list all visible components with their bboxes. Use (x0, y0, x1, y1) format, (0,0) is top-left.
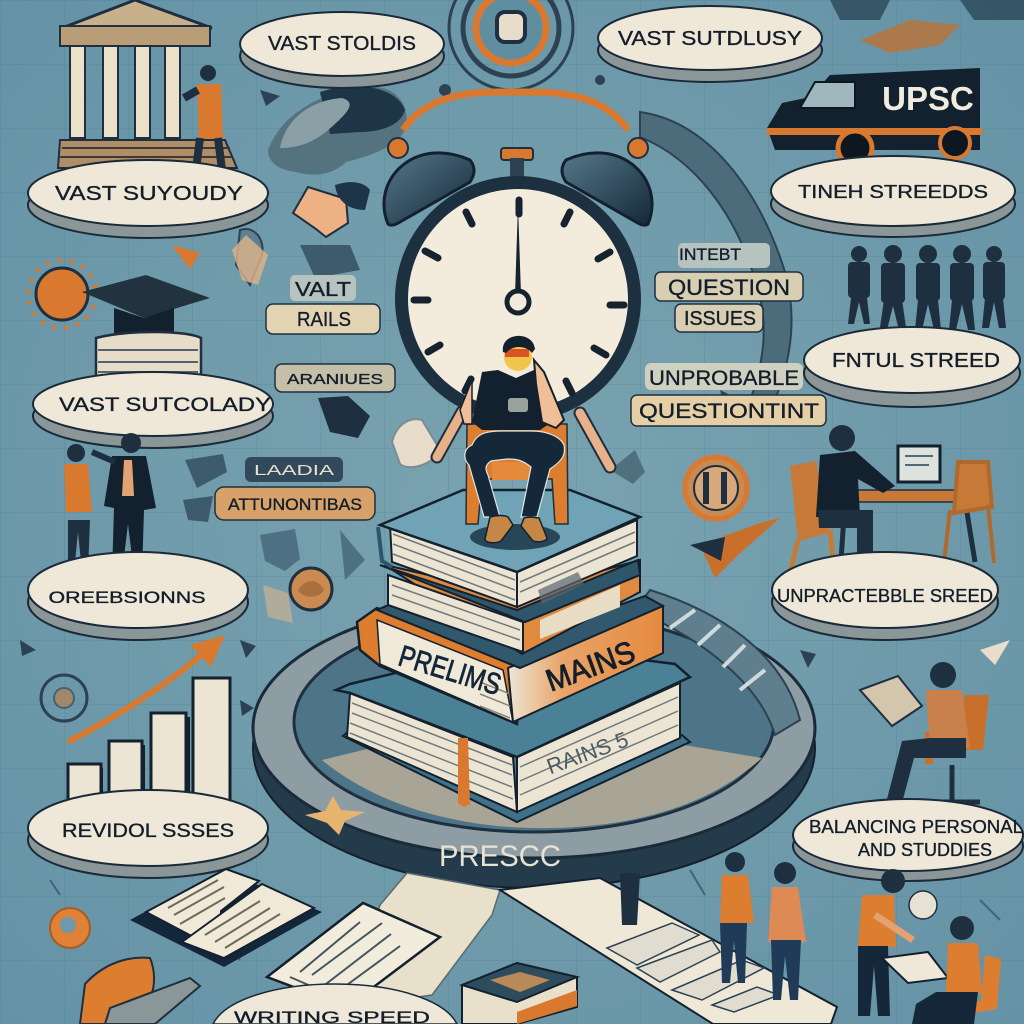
tag: VALT RAILS: RAILS (297, 309, 351, 331)
circular platform ring: PRESCC (439, 840, 561, 873)
icon: classical building with person (58, 0, 237, 170)
label: left disc 4 (28, 790, 268, 878)
label: left disc 2 (33, 372, 273, 448)
second book (380, 560, 640, 654)
orange ring doodle and bag (50, 908, 200, 1024)
group: two people talking (64, 433, 156, 574)
label: right disc 3 (772, 552, 998, 640)
label: right disc 4 (793, 799, 1023, 881)
figures: two standing students (720, 852, 806, 1000)
label: left disc 4: REVIDOL SSSES (62, 821, 234, 842)
label: right disc 1: TINEH STREEDDS (798, 182, 988, 202)
tag: INTEBT QUESTION ISSUES (655, 243, 803, 332)
tag: VALT RAILS (266, 275, 380, 334)
label: top-left disc (28, 160, 268, 238)
tag: ARANIUES: ARANIUES (287, 371, 383, 388)
tag: UNPROBABLE QUESTIONTINT: UNPROBABLE (649, 367, 799, 390)
tag: ATTUNONTIBAS: ATTUNONTIBAS (228, 495, 362, 514)
circular platform ring (253, 590, 815, 888)
prelims and mains book (357, 596, 663, 724)
label: top-left disc: VAST SUYOUDY (55, 183, 243, 205)
label: writing speed disc (213, 984, 457, 1024)
label: right disc 1 (771, 156, 1015, 237)
badge and figures: two people sharing paper (858, 869, 1001, 1024)
orange coin icon (290, 568, 332, 610)
tag: UNPROBABLE QUESTIONTINT (631, 363, 826, 426)
tag: ATTUNONTIBAS: LAADIA (254, 462, 334, 479)
label: right disc 2 (804, 327, 1020, 407)
prelims and mains book: PRELIMS (395, 640, 505, 702)
figure: reader in chair (860, 662, 989, 808)
label: top disc 2: VAST STOLDIS (268, 33, 416, 55)
label: top disc 3: VAST SUTDLUSY (618, 28, 802, 50)
bar chart with rising arrow (41, 635, 230, 806)
tag: ATTUNONTIBAS (215, 457, 375, 520)
orange sketches top right (830, 0, 1024, 53)
long page plank with worksheets (500, 873, 837, 1024)
tag: INTEBT QUESTION ISSUES: ISSUES (684, 308, 756, 330)
label: left disc 2: VAST SUTCOLADY (59, 395, 271, 416)
prelims and mains book: MAINS (541, 634, 640, 698)
tag: ARANIUES (275, 364, 395, 392)
open book (130, 869, 322, 967)
figure: student at desk (788, 425, 994, 580)
bottom book (336, 644, 690, 822)
icon: sun and graduation cap with books (28, 260, 210, 388)
top book (378, 490, 640, 607)
tag: INTEBT QUESTION ISSUES: QUESTION (668, 275, 790, 300)
tag: INTEBT QUESTION ISSUES: INTEBT (679, 245, 741, 264)
tag: VALT RAILS: VALT (295, 279, 351, 301)
icon: row of five figures (848, 245, 1006, 334)
icon: UPSC van: UPSC (882, 80, 974, 117)
tag: UNPROBABLE QUESTIONTINT: QUESTIONTINT (639, 400, 819, 423)
label: top disc 3 (598, 6, 822, 82)
label: right disc 4: BALANCING PERSONAL (809, 817, 1023, 837)
small book icon (462, 963, 577, 1024)
icon: orange medallion (685, 457, 747, 519)
figure: person on chair atop books (437, 336, 610, 543)
label: right disc 3: UNPRACTEBBLE SREED (777, 586, 993, 606)
concentric target icon (449, 0, 573, 90)
icon: UPSC van (767, 68, 982, 165)
curved track behind clock (640, 112, 792, 422)
icon: alarm clock (384, 92, 652, 422)
label: left disc 3: OREEBSIONNS (48, 588, 206, 607)
bottom book: RAINS 5 (543, 727, 632, 779)
label: right disc 2: FNTUL STREED (832, 350, 1000, 372)
notebook pages and writing (267, 873, 500, 1007)
label: right disc 4: AND STUDDIES (858, 840, 992, 860)
label: top disc 2 (240, 12, 444, 88)
label: left disc 3 (28, 552, 248, 640)
book stack (336, 490, 690, 822)
